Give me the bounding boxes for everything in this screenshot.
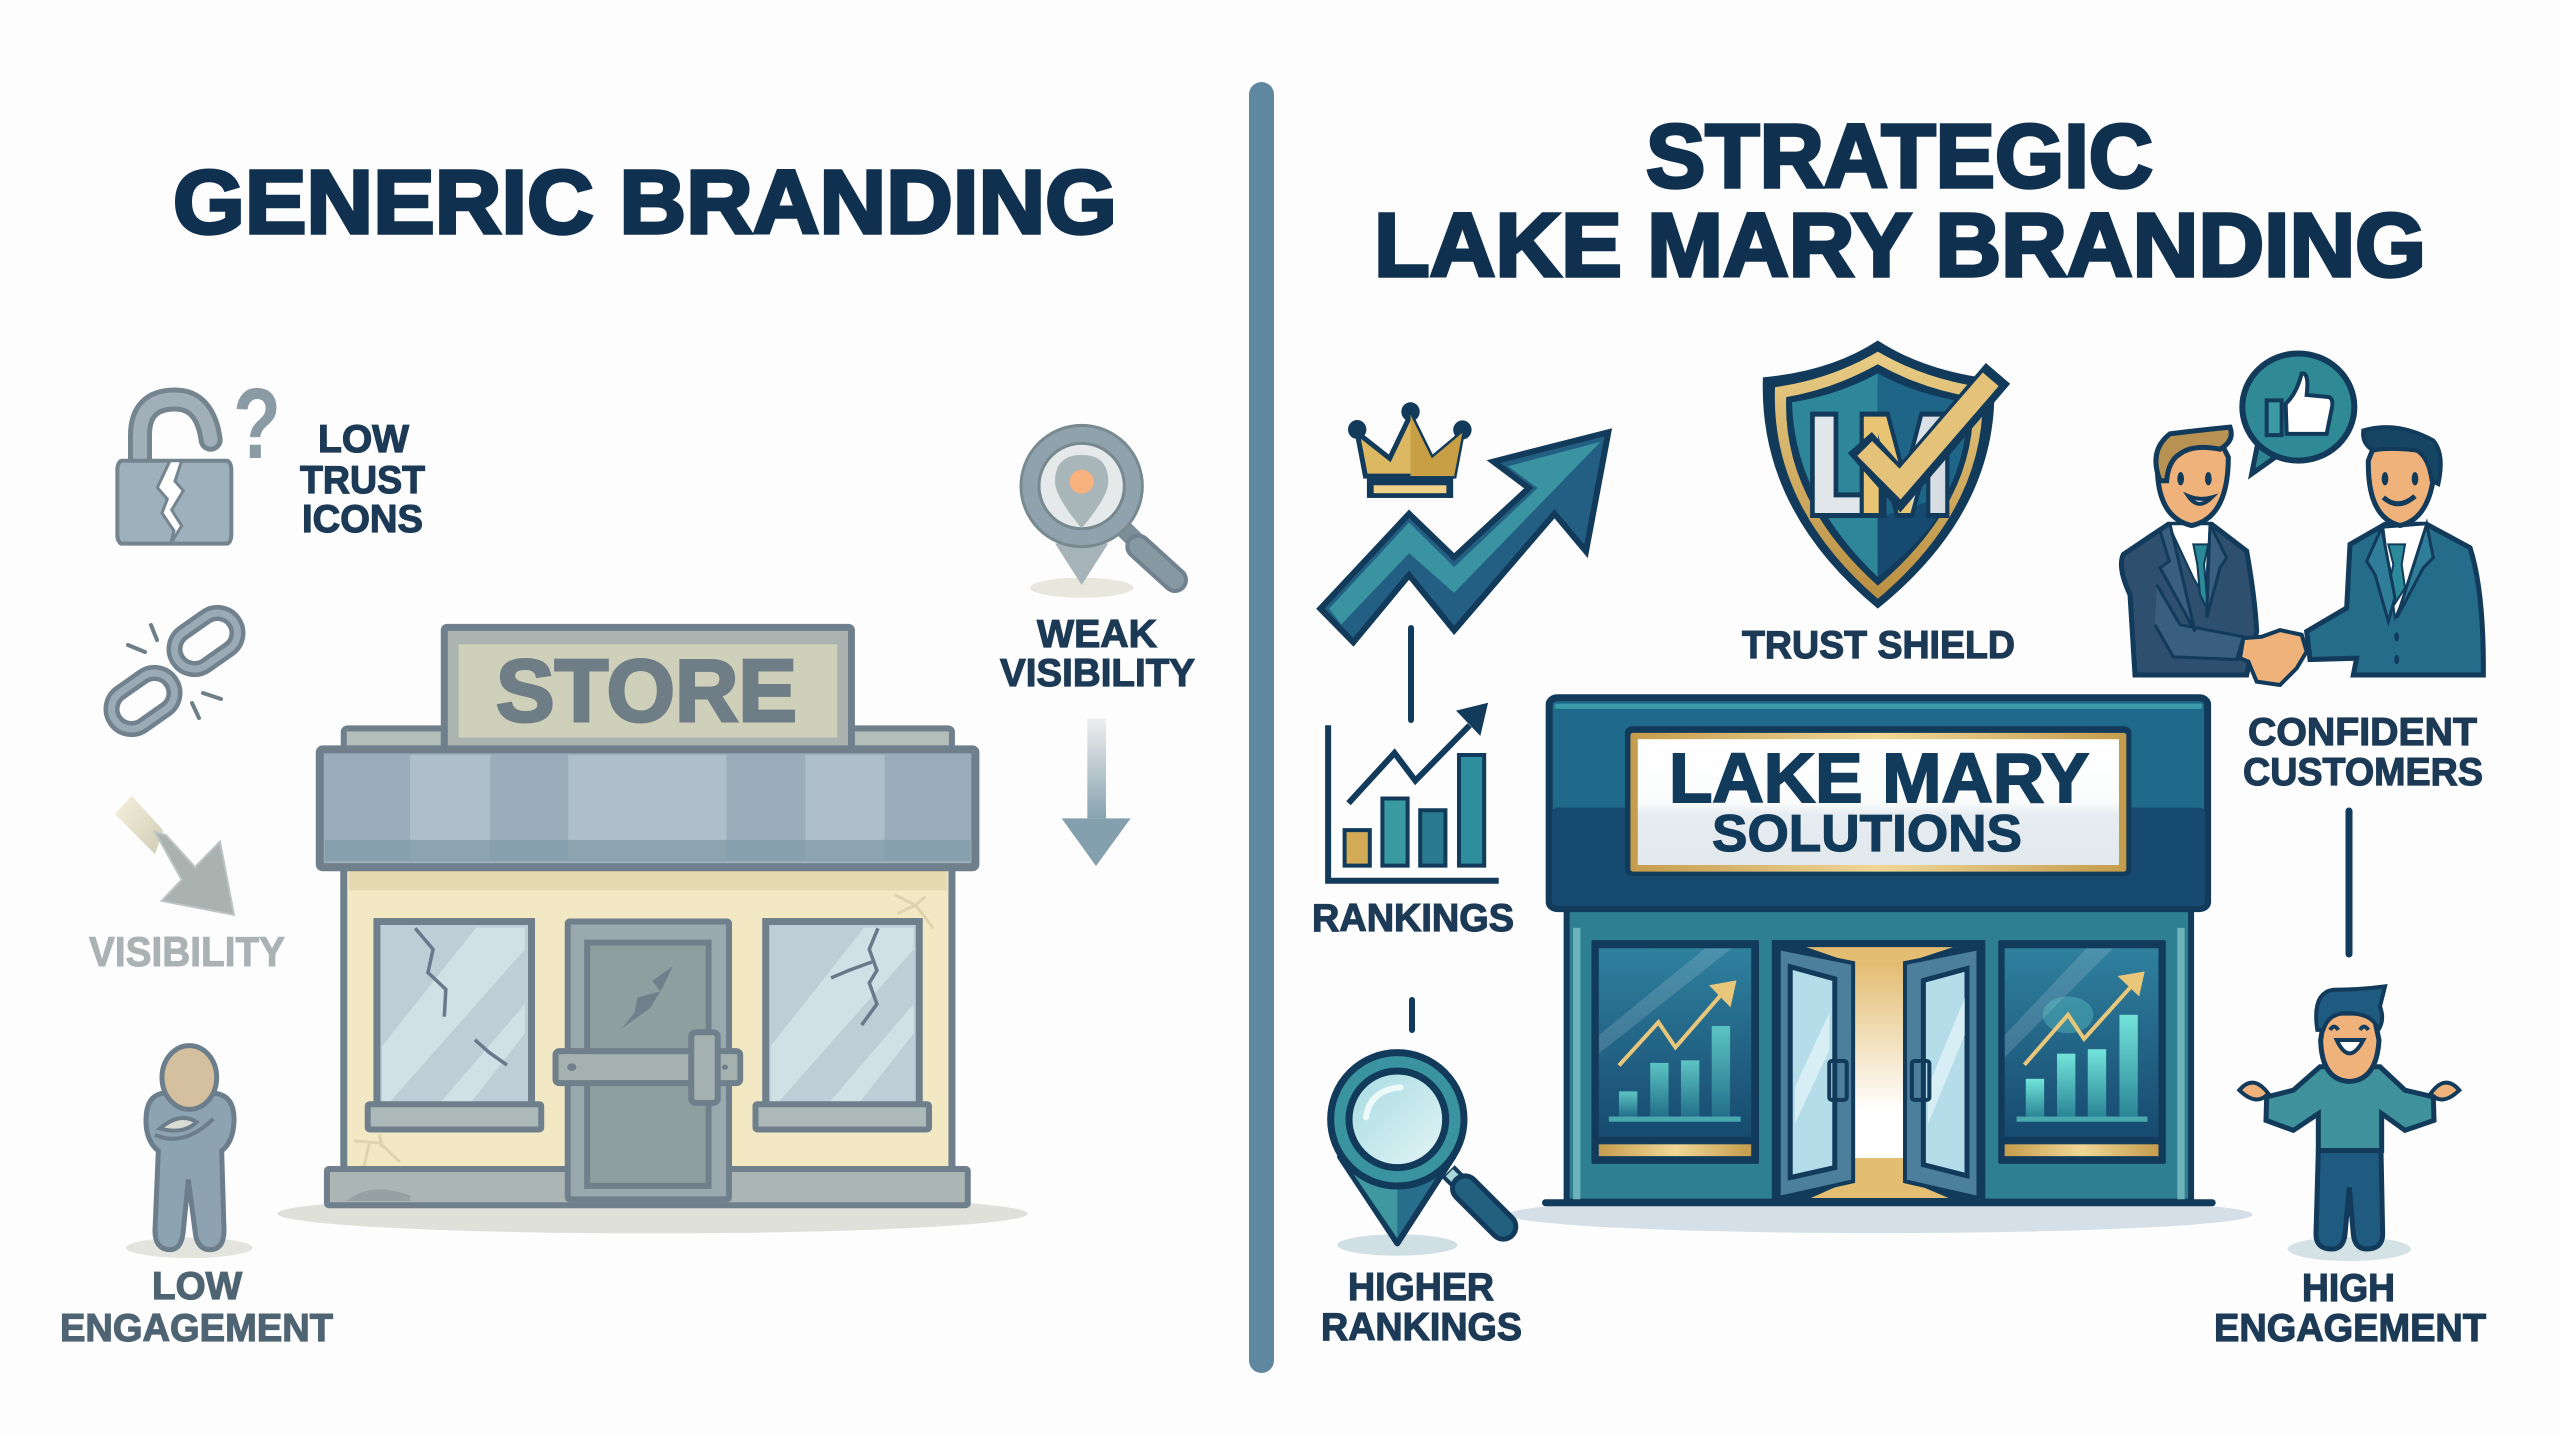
label: weak visibility: WEAK: [1037, 613, 1157, 656]
icon: magnifier location pin: [1331, 1053, 1503, 1256]
store body: [1567, 906, 2191, 1202]
left window with chart: [1591, 940, 1759, 1164]
icon: rankings bar chart: [1328, 703, 1499, 881]
label: high engagement: ENGAGEMENT: [2214, 1307, 2486, 1350]
icon: zig-zag growth arrow: [1320, 432, 1608, 642]
left customer: [2121, 427, 2257, 675]
label: low trust icons: [300, 418, 425, 541]
title: strategic lake mary branding: [1374, 107, 2426, 296]
panel: strategic lake mary branding: [1312, 341, 2486, 1350]
header fascia: [1549, 698, 2208, 909]
shaking hands: [2240, 630, 2307, 685]
center divider: [1249, 82, 1274, 1373]
label: visibility: VISIBILITY: [89, 928, 285, 975]
speech bubble with thumbs up: [2242, 353, 2354, 474]
store sign: [444, 627, 851, 754]
store sign text: lake mary solutions: SOLUTIONS: [1712, 805, 2022, 863]
title: generic branding: GENERIC BRANDING: [173, 153, 1117, 253]
icon: broken chain: [104, 605, 245, 737]
boarded door: [556, 922, 740, 1199]
label: low trust icons: TRUST: [300, 459, 425, 502]
open double doors: [1772, 940, 1985, 1200]
label: low engagement: [60, 1265, 333, 1350]
label: high engagement: HIGH: [2302, 1267, 2395, 1310]
icon: crown: [1348, 402, 1472, 498]
label: rankings: RANKINGS: [1312, 897, 1514, 940]
connector: arrow to rankings: [1408, 628, 1414, 720]
icon: declining visibility arrow: [115, 796, 234, 915]
store sign text: lake mary solutions: LAKE MARY: [1669, 739, 2089, 817]
icon: person with crossed arms: [126, 1046, 253, 1258]
store wall: [344, 865, 952, 1170]
icon: trust shield: L: [1806, 386, 1886, 543]
connector: customers to engagement: [2346, 811, 2352, 954]
title: strategic lake mary branding: LAKE MARY BRANDING: [1374, 196, 2426, 296]
gold sign frame: [1625, 726, 2131, 876]
label: confident customers: CUSTOMERS: [2243, 751, 2483, 794]
label: confident customers: [2243, 711, 2483, 794]
panel: generic branding: [60, 368, 1195, 1350]
icon: trust shield: [1763, 341, 1998, 609]
striped awning: [320, 749, 975, 867]
label: high engagement: [2214, 1267, 2486, 1350]
arrow: fading down arrow: [1062, 718, 1131, 866]
base: [327, 1169, 968, 1205]
ground line: [1546, 1199, 2212, 1206]
label: weak visibility: VISIBILITY: [1000, 652, 1195, 695]
label: low trust icons: ICONS: [302, 498, 423, 541]
label: confident customers: CONFIDENT: [2248, 711, 2477, 754]
label: low trust icons: LOW: [318, 418, 409, 461]
label: low engagement: ENGAGEMENT: [60, 1307, 333, 1350]
right customer: [2307, 427, 2483, 675]
icon: broken padlock with question mark: [117, 368, 281, 544]
illustration: lake mary storefront: [1508, 698, 2253, 1233]
icon: weak visibility magnifier and pin: [1021, 425, 1175, 598]
connector: rankings to magnifier: [1409, 1000, 1415, 1030]
right window: [756, 922, 929, 1129]
icon: confident customers handshake: [2121, 353, 2483, 685]
icon: trust shield: M: [1856, 386, 1953, 543]
illustration: run-down store: [277, 627, 1027, 1233]
right window with chart: [1998, 940, 2166, 1164]
left window: [368, 922, 541, 1129]
label: higher rankings: RANKINGS: [1321, 1306, 1522, 1349]
store sign text: STORE: [496, 641, 797, 740]
label: higher rankings: [1321, 1266, 1522, 1349]
label: weak visibility: [1000, 613, 1195, 695]
store sign text: lake mary solutions: [1669, 739, 2089, 863]
title: strategic lake mary branding: STRATEGIC: [1646, 107, 2153, 207]
label: trust shield: TRUST SHIELD: [1742, 624, 2015, 667]
label: low engagement: LOW: [152, 1265, 242, 1308]
label: higher rankings: HIGHER: [1348, 1266, 1494, 1309]
icon: happy engaged person: [2239, 986, 2459, 1261]
icon: broken padlock with question mark: ?: [233, 368, 281, 480]
